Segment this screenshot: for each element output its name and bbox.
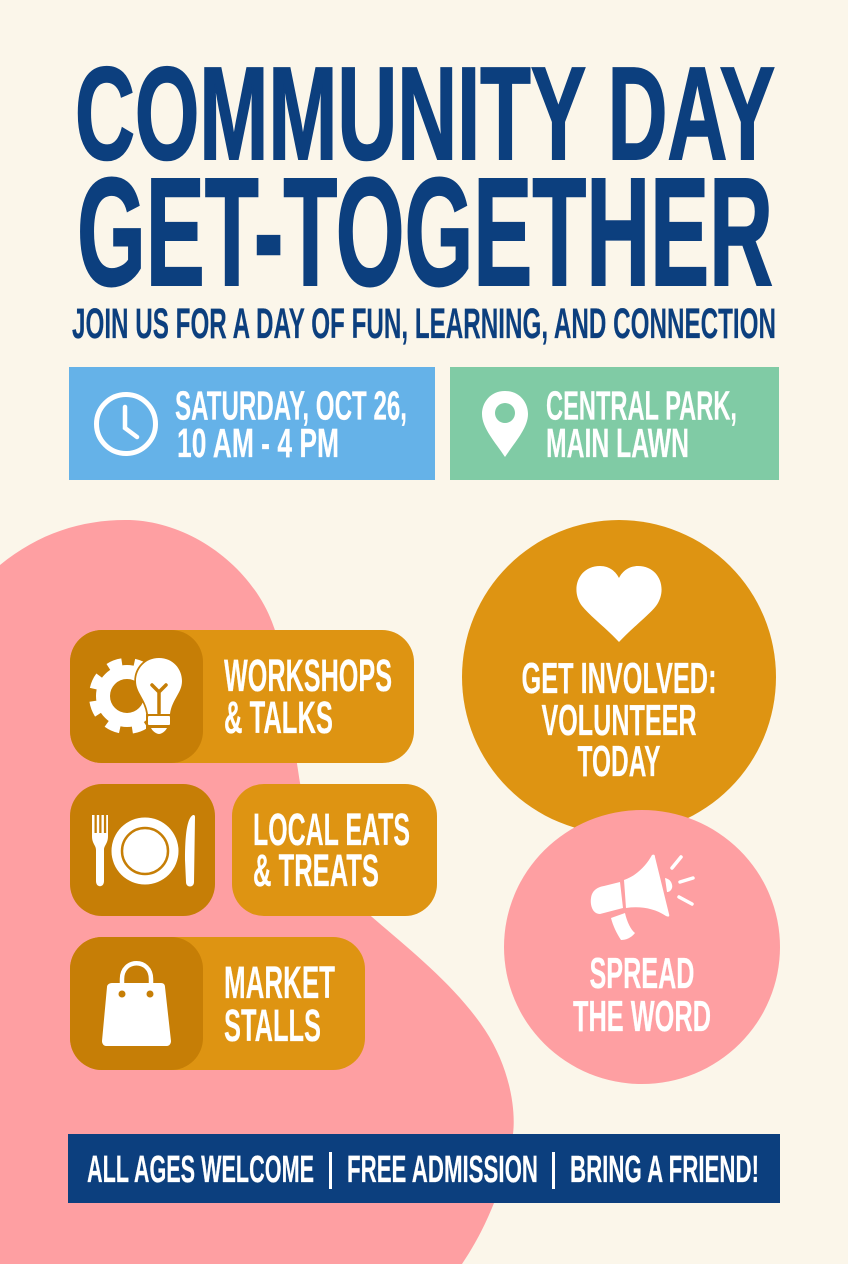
spread the word text: THE WORD [573,992,711,1041]
icon: gear and light bulb [87,656,182,736]
panel: date and time [69,367,435,480]
icon: clock [96,394,156,454]
spread the word text [573,949,711,1041]
panel: get involved circle [462,520,776,834]
date text: SATURDAY, OCT 26, [175,382,407,428]
location text: MAIN LAWN [546,420,689,466]
panel: local eats text tile: LOCAL EATS [253,804,410,855]
panel: spread the word circle [504,810,780,1084]
get involved text: VOLUNTEER [542,696,696,745]
pink background blob [0,520,514,1264]
workshops text: & TALKS [224,692,333,743]
date text [175,382,407,466]
market text: STALLS [224,1000,321,1051]
panel: workshops and talks [70,630,414,763]
footer banner [68,1134,780,1203]
panel: market stalls [70,937,365,1070]
title [75,40,775,318]
icon: fork plate knife [92,815,195,886]
footer banner: ALL AGES WELCOME [87,1149,314,1191]
workshops text: WORKSHOPS [224,650,392,701]
get involved text: TODAY [578,737,660,786]
icon: heart [576,566,662,642]
market text: MARKET [224,957,335,1008]
panel: local eats icon tile [70,784,215,916]
get involved text [522,654,716,786]
panel: local eats text tile: & TREATS [253,845,379,896]
spread the word text: SPREAD [590,949,694,998]
location text [546,382,737,466]
icon: shopping bag [102,963,171,1046]
panel: local eats text tile [232,784,437,916]
icon: map pin [482,391,528,457]
panel: location [450,367,779,480]
workshops text [224,650,392,743]
market text [224,957,335,1051]
icon: megaphone [591,855,693,940]
date text: 10 AM - 4 PM [177,420,339,466]
footer banner: FREE ADMISSION [347,1149,538,1191]
